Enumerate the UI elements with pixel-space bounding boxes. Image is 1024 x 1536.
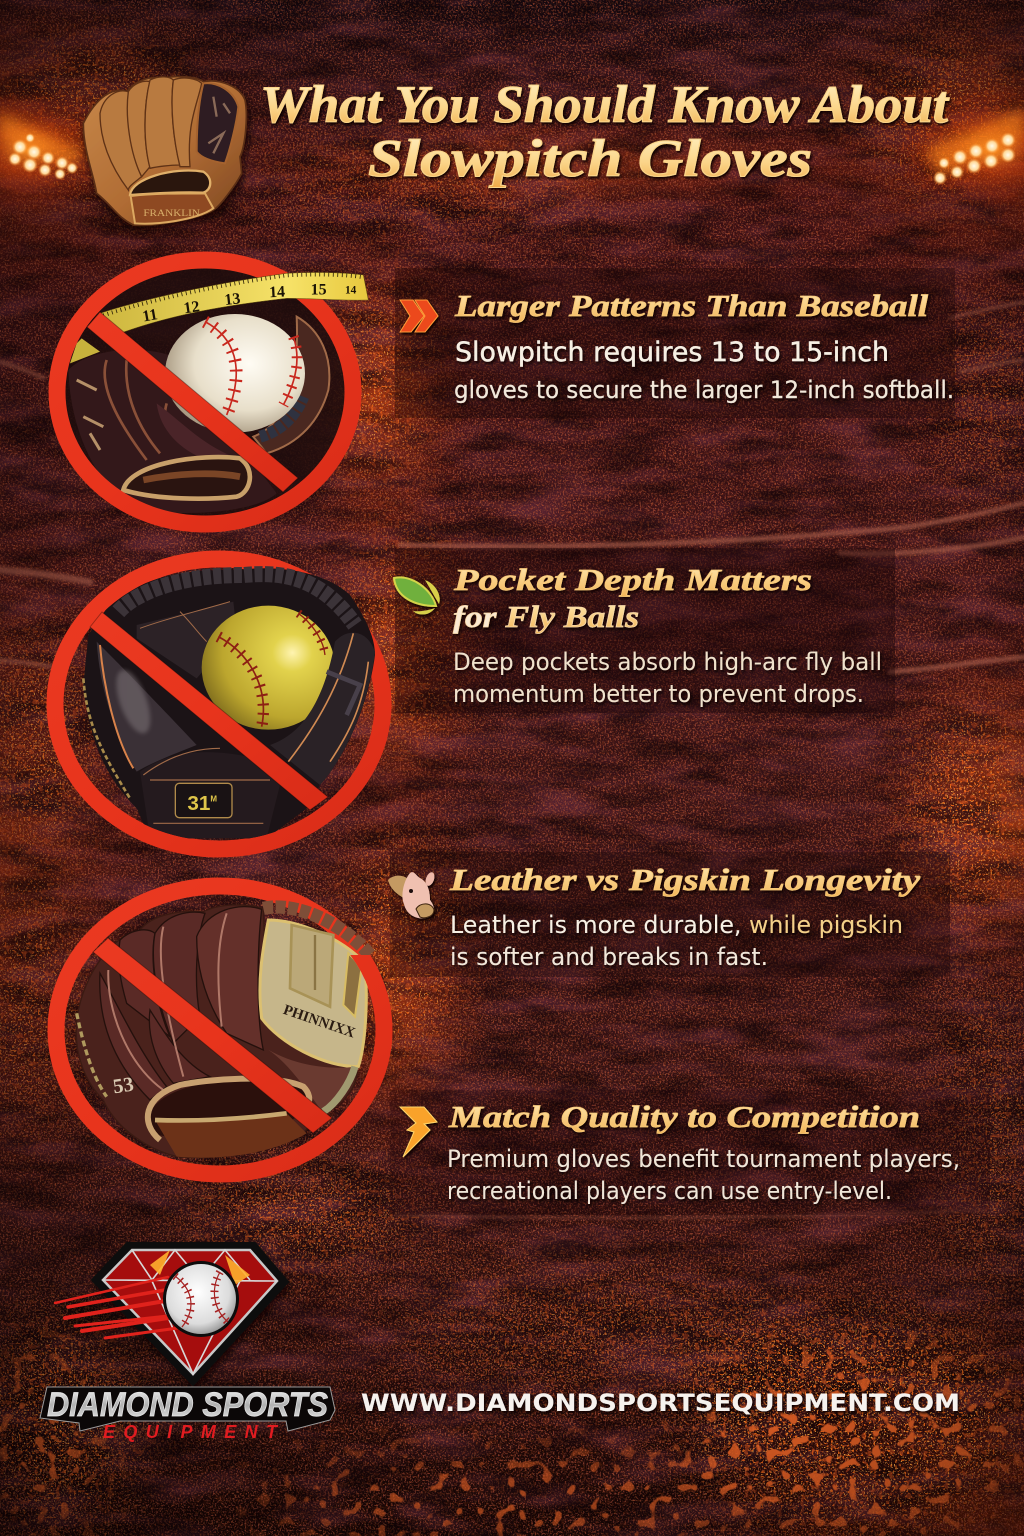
text block: match quality: Premium gloves benefit tournament players, (447, 1145, 960, 1173)
tape measure: 14 (269, 284, 286, 301)
text block: pocket depth: Pocket Depth Matters (453, 562, 812, 597)
panel: prohibition sign with softball in dark glove (55, 559, 383, 849)
logo plate and wordmark (40, 1386, 335, 1442)
text block: larger patterns: gloves to secure the larger 12-inch softball. (454, 376, 954, 404)
panel: prohibition sign with brown glove (56, 886, 384, 1174)
tape measure: 13 (224, 290, 241, 309)
tape measure: 14 (345, 284, 357, 296)
website url: WWW.DIAMONDSPORTSEQUIPMENT.COM (361, 1389, 960, 1417)
logo plate and wordmark: DIAMOND SPORTS (47, 1386, 328, 1424)
icon: green leaf (394, 577, 440, 615)
text block: leather vs pigskin: Leather vs Pigskin Longevity (449, 862, 920, 897)
title: Slowpitch Gloves (368, 130, 812, 188)
tape measure (100, 273, 368, 333)
icon: lightning bolt (400, 1107, 437, 1157)
tape measure: 12 (183, 298, 201, 317)
logo: Diamond Sports Equipment (40, 1243, 335, 1442)
text block: larger patterns: Slowpitch requires 13 to 15-inch (455, 337, 889, 368)
text block: match quality: recreational players can use entry-level. (447, 1177, 892, 1205)
panel: prohibition sign with softball in dark glove: 31 (187, 792, 210, 815)
text block: leather vs pigskin: Leather is more durable, while pigskin (450, 911, 903, 939)
panel: prohibition sign with softball in dark glove: M (210, 794, 217, 803)
text block: leather vs pigskin: is softer and breaks in fast. (450, 943, 768, 971)
text block: larger patterns (454, 288, 954, 404)
title: What You Should Know About (260, 76, 950, 134)
icon: pig head (388, 871, 436, 918)
text block: larger patterns: Larger Patterns Than Baseball (454, 288, 928, 323)
text block: match quality (447, 1099, 960, 1205)
logo plate and wordmark: EQUIPMENT (103, 1422, 279, 1442)
panel: prohibition sign with baseball and tape measure (50, 257, 368, 533)
text block: pocket depth (453, 562, 882, 708)
text block: pocket depth: momentum better to prevent drops. (453, 680, 864, 708)
text block: pocket depth: Deep pockets absorb high-arc fly ball (453, 648, 882, 676)
icon: tan leather glove: FRANKLIN (143, 209, 200, 219)
text block: pocket depth: for Fly Balls (453, 599, 639, 634)
tape measure: 11 (141, 306, 159, 326)
tape measure: 15 (311, 281, 327, 298)
text block: leather vs pigskin (449, 862, 920, 971)
icon: orange chevrons (400, 300, 438, 332)
icon: diamond with baseball (55, 1243, 288, 1385)
title (260, 76, 950, 188)
panel: prohibition sign with brown glove: PHINNIXX (281, 1002, 358, 1042)
text block: match quality: Match Quality to Competition (448, 1099, 920, 1134)
stadium light: right (892, 88, 1024, 212)
panel: prohibition sign with brown glove: 53 (112, 1074, 135, 1098)
icon: tan leather glove (83, 77, 246, 225)
stadium light: left (0, 88, 123, 212)
